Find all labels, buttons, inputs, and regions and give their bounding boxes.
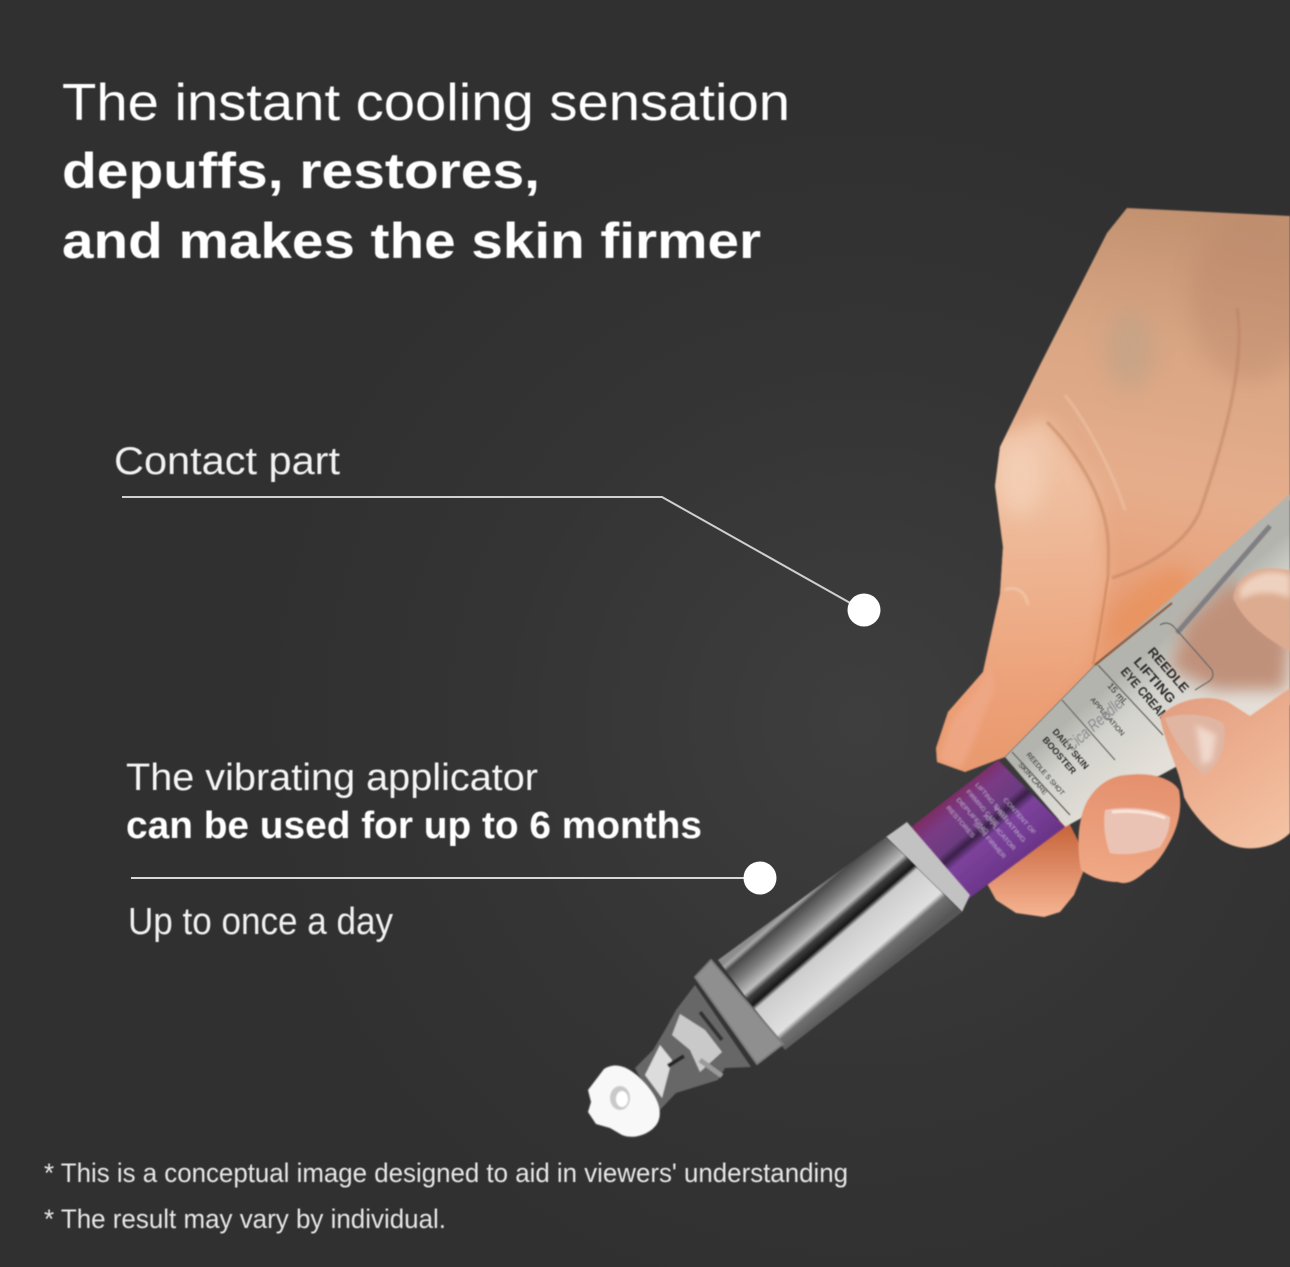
- title: [62, 74, 790, 269]
- tube: purple band with ingredient text: CONTENT OF: [1001, 797, 1036, 836]
- tube: label text: LIFTING: [1131, 654, 1179, 706]
- leader line: [131, 877, 750, 879]
- tube: label text: EYE CREAM: [1118, 664, 1172, 724]
- tube: label text: REEDLE: [1145, 644, 1192, 696]
- tube: purple band with ingredient text: RESTORES: [944, 805, 975, 840]
- tube: window showing finger through the clear tube: [1170, 580, 1290, 690]
- applicator: silver barrel: [718, 837, 962, 1050]
- tube: clear collar: [886, 822, 970, 912]
- usage frequency: Up to once a day: [128, 901, 393, 943]
- tube: purple band with ingredient text: APPLICATOR: [981, 813, 1017, 853]
- title: The instant cooling sensation: [62, 74, 790, 132]
- hand: index fingertip with nail: [1078, 774, 1180, 883]
- tube: transparent body behind finger: [1005, 494, 1290, 827]
- tube: label text: 15 mL: [1105, 681, 1130, 707]
- tube: purple band with ingredient text: VIBRATING: [991, 805, 1026, 844]
- tube: purple band with ingredient text: DEPUFFING: [954, 797, 989, 836]
- title: depuffs, restores,: [62, 143, 540, 199]
- footnotes: * This is a conceptual image designed to aid in viewers' understanding: [44, 1158, 848, 1188]
- footnotes: * The result may vary by individual.: [44, 1204, 446, 1234]
- applicator: white contact tip: [588, 1065, 660, 1137]
- tube: purple band with ingredient text: [907, 760, 1065, 903]
- tube: label text: SKIN CARE: [1016, 762, 1048, 797]
- hand: palm and thumb: [930, 208, 1290, 775]
- footnotes: [44, 1158, 848, 1234]
- title: and makes the skin firmer: [62, 213, 761, 269]
- callout: vibrating applicator: [126, 757, 776, 943]
- tube: label text: REEDLE S SHOT: [1024, 752, 1066, 798]
- tube: label rules: [1012, 623, 1213, 815]
- marker dot: [848, 594, 880, 626]
- hand: lower finger beneath tube: [985, 815, 1088, 917]
- callout text: can be used for up to 6 months: [126, 805, 702, 847]
- callout text: The vibrating applicator: [126, 757, 538, 799]
- applicator: clear neck: [635, 985, 751, 1112]
- tube: label text: DAILY SKIN: [1050, 727, 1091, 771]
- tube: label text: APPLICATION: [1088, 697, 1125, 738]
- callout: contact part: [114, 440, 880, 626]
- hand: top right finger: [1233, 568, 1290, 652]
- tube: dark streak on upper edge: [1177, 526, 1270, 633]
- tube: label text: BOOSTER: [1040, 735, 1079, 776]
- tube: purple band with ingredient text: FIRMING CARE: [964, 789, 999, 828]
- tube: seam between hand and tube: [1095, 603, 1172, 665]
- hand: second finger with nail: [1160, 688, 1290, 848]
- illustration: hand holding eye cream applicator: [588, 208, 1290, 1137]
- tube: purple band with ingredient text: LIFTING SHOT: [973, 782, 1008, 821]
- tube: label text: Cica Reedle: [1062, 694, 1127, 755]
- tube: purple band with ingredient text: SKIN FIRMER: [971, 821, 1007, 861]
- callout label: Contact part: [114, 440, 340, 483]
- leader line: [122, 497, 852, 604]
- marker dot: [744, 862, 776, 894]
- applicator: grey ring: [695, 960, 783, 1064]
- tube: label text: [1016, 644, 1192, 798]
- callout text: [126, 757, 702, 847]
